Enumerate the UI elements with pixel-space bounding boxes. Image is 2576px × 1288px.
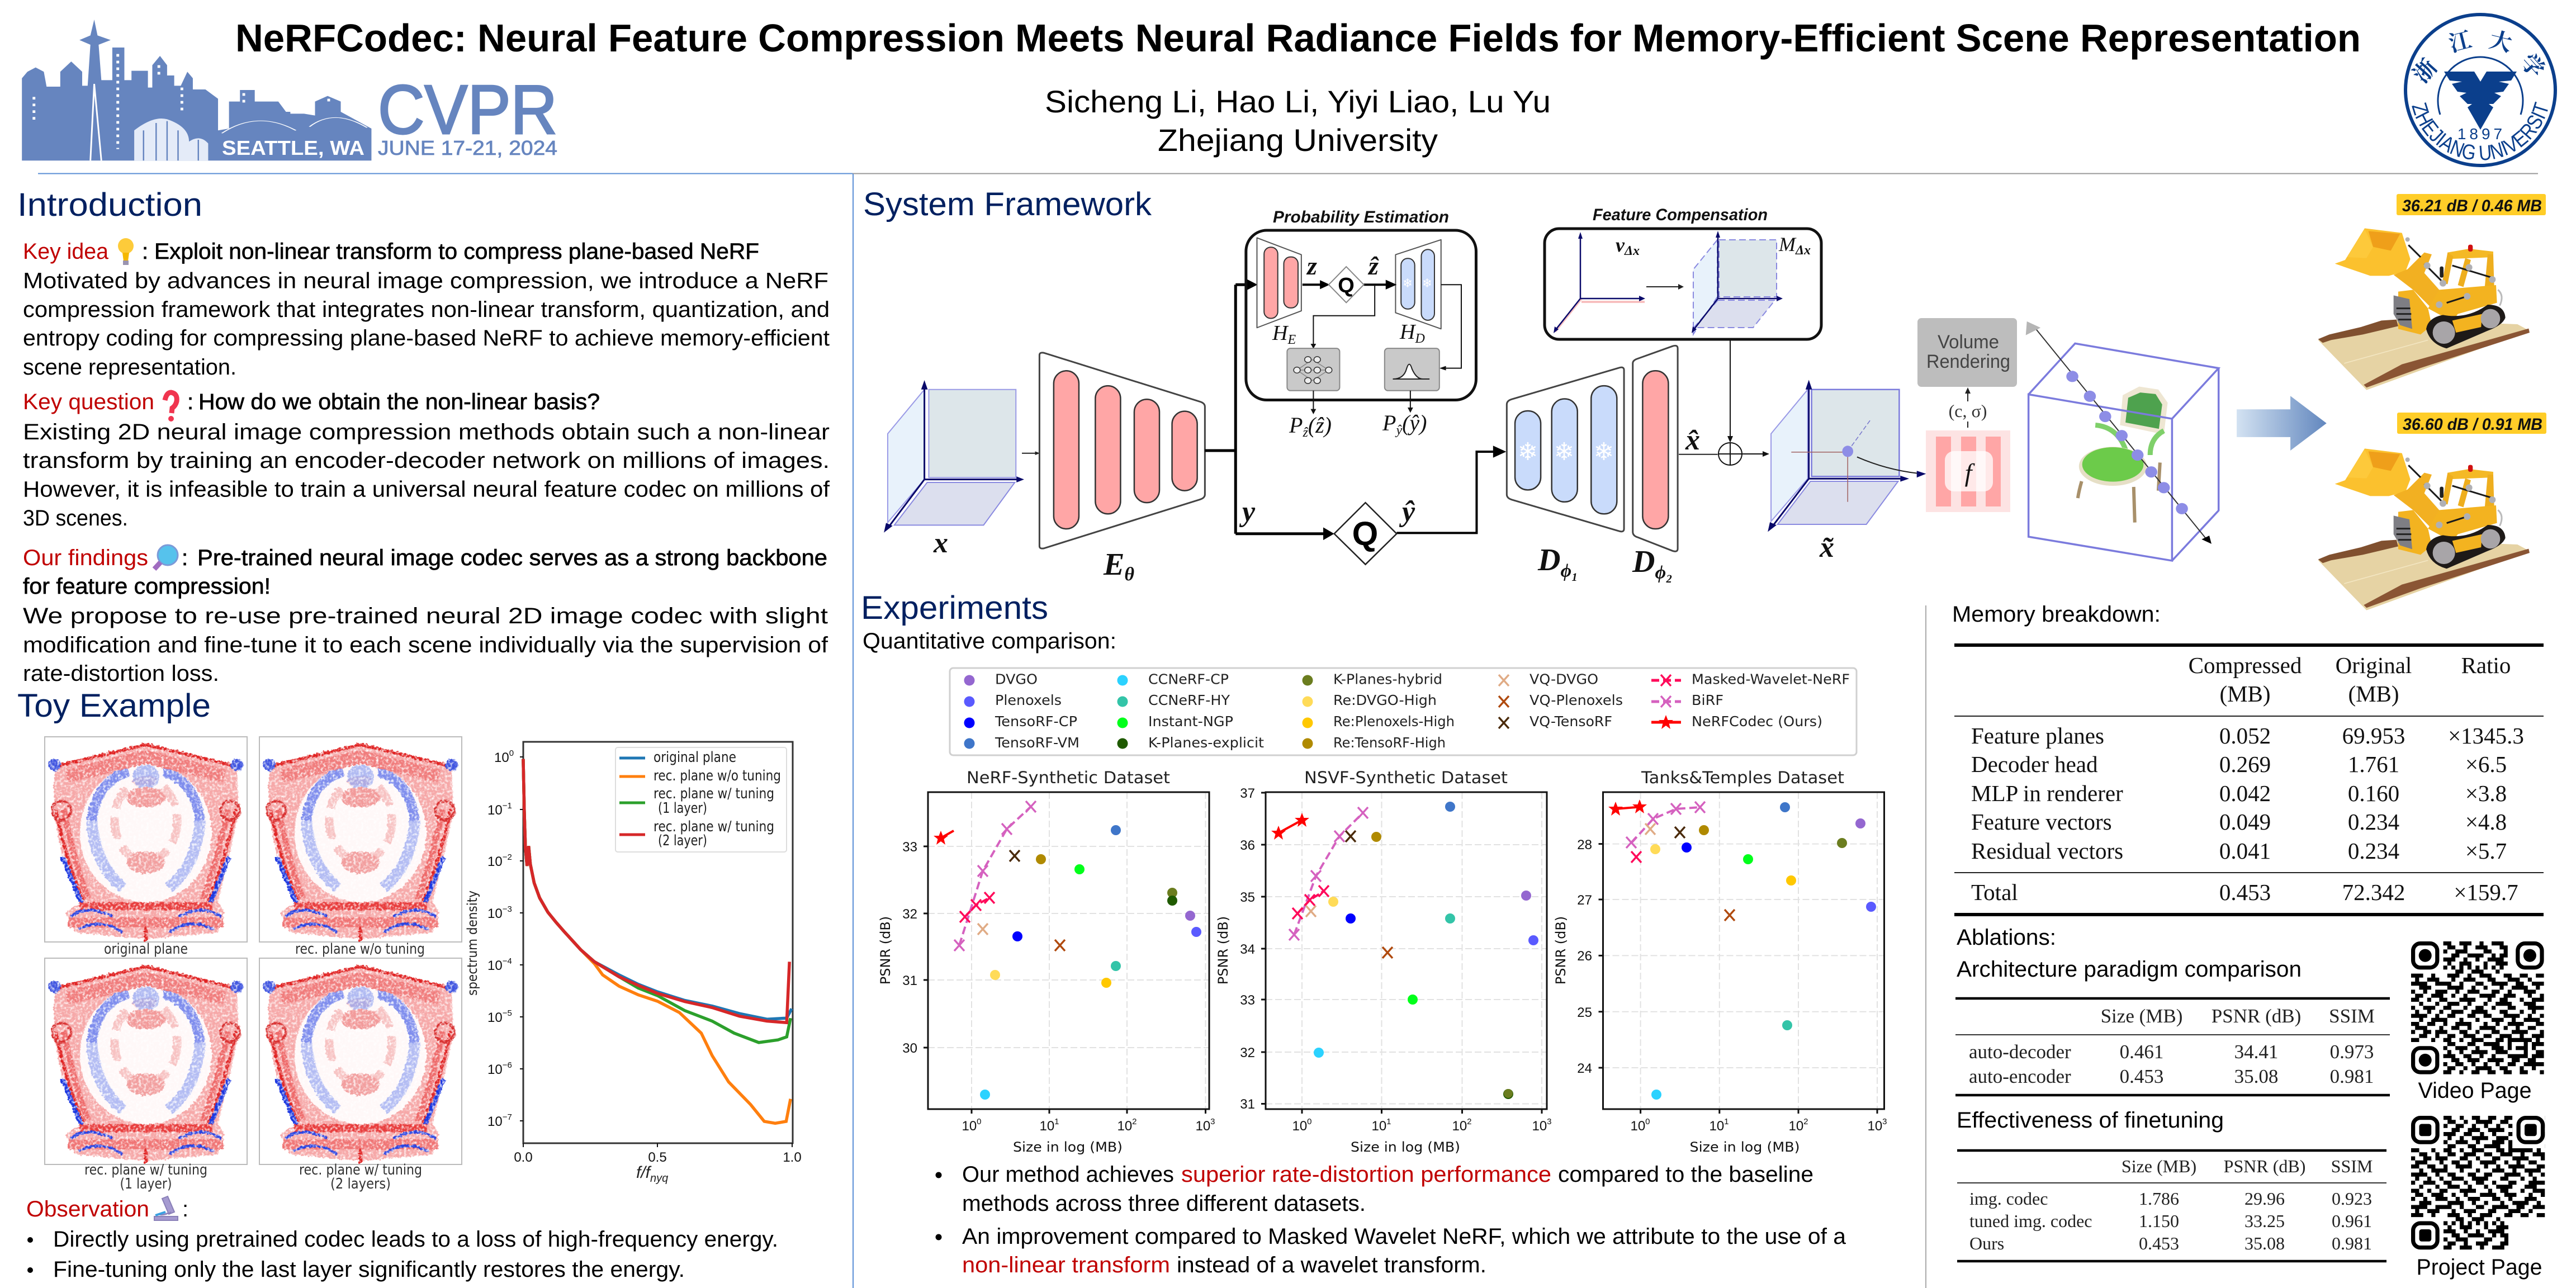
math labels: (ẑ) bbox=[1308, 413, 1332, 438]
authors: Sicheng Li, Hao Li, Yiyi Liao, Lu Yu bbox=[1045, 84, 1551, 119]
table: memory breakdown: 0.269 bbox=[2219, 751, 2271, 777]
chart legend: VQ-Plenoxels bbox=[1530, 692, 1623, 708]
result images: bulldozer renders bbox=[2318, 228, 2530, 610]
text block: key question: How do we obtain the non-linear basis? bbox=[198, 390, 600, 414]
math labels: P bbox=[1382, 410, 1396, 435]
logo: Zhejiang University seal bbox=[2404, 13, 2557, 167]
table: memory breakdown: 0.234 bbox=[2348, 838, 2399, 864]
chart: spectrum density: −5 bbox=[503, 1008, 512, 1018]
text block: key idea: Exploit non-linear transform to compress plane-based NeRF bbox=[154, 239, 759, 264]
chart: NeRF-Synthetic: PSNR (dB) bbox=[878, 916, 893, 984]
header: title: NeRFCodec: Neural Feature Compression Meets Neural Radiance Fields for Memory-Efficient Scene Representation bbox=[235, 16, 2361, 60]
table: finetuning: 29.96 bbox=[2244, 1188, 2285, 1209]
table: memory breakdown: ×6.5 bbox=[2465, 751, 2507, 777]
table: architecture paradigm: PSNR (dB) bbox=[2212, 1005, 2301, 1027]
chart: NeRF-Synthetic: Size in log (MB) bbox=[1013, 1139, 1123, 1155]
table: memory breakdown: Ratio bbox=[2461, 652, 2511, 678]
chart: Tanks and Temples: 2 bbox=[1803, 1117, 1808, 1126]
snowflake icons: ❄ bbox=[1518, 438, 1538, 466]
text block: our findings bbox=[23, 545, 828, 686]
title: probability estimation: Probability Estimation bbox=[1273, 208, 1449, 226]
affiliation: Zhejiang University bbox=[1158, 122, 1438, 158]
chart: Tanks and Temples: PSNR (dB) bbox=[1553, 916, 1569, 984]
table: memory breakdown: (MB) bbox=[2219, 681, 2271, 707]
chart legend: Masked-Wavelet-NeRF bbox=[1692, 671, 1850, 688]
chart: spectrum density: nyq bbox=[650, 1172, 668, 1185]
title: feature compensation: Feature Compensation bbox=[1593, 206, 1768, 224]
table: architecture paradigm: 0.981 bbox=[2330, 1066, 2374, 1087]
text block: experiment findings: compared to the baseline bbox=[1558, 1162, 1813, 1187]
text block: our findings: : bbox=[182, 546, 188, 570]
chart: spectrum density: 10 bbox=[494, 750, 509, 765]
chart: spectrum density: −2 bbox=[503, 853, 512, 862]
heatmap: rec plane tuning 1 layer: rec. plane w/ tuning bbox=[84, 1162, 207, 1178]
text block: our findings: We propose to re-use pre-trained neural 2D image codec with slight bbox=[23, 604, 828, 628]
chart: Tanks and Temples: 24 bbox=[1577, 1061, 1592, 1076]
table: memory breakdown bbox=[1954, 645, 2544, 915]
chart: spectrum density: rec. plane w/ tuning bbox=[654, 785, 774, 802]
heatmap: rec plane tuning 2 layers: (2 layers) bbox=[330, 1176, 391, 1192]
chart: spectrum density: 10 bbox=[487, 1010, 503, 1025]
subheading: effectiveness of finetuning: Effectiveness of finetuning bbox=[1957, 1108, 2224, 1133]
3D box with chair and ray samples bbox=[2026, 321, 2219, 561]
chart: spectrum density: 10 bbox=[487, 854, 503, 869]
snowflake icons: ❄ bbox=[1554, 438, 1574, 466]
QR code: video page: Video Page bbox=[2418, 1078, 2531, 1103]
table: architecture paradigm: 0.973 bbox=[2330, 1041, 2374, 1063]
chart: NSVF-Synthetic: 3 bbox=[1547, 1117, 1552, 1126]
chart: NeRF-Synthetic: 31 bbox=[902, 973, 917, 988]
text block: our findings: rate-distortion loss. bbox=[23, 661, 219, 686]
text block: key idea: entropy coding for compressing plane-based NeRF to achieve memory-efficient bbox=[23, 326, 830, 351]
text block: our findings: Pre-trained neural image codec serves as a strong backbone bbox=[197, 546, 827, 570]
panel: ablations bbox=[1955, 925, 2390, 1261]
heatmap: rec plane tuning 2 layers bbox=[259, 958, 462, 1192]
text block: key question bbox=[23, 390, 830, 531]
chart: NeRF-Synthetic: 32 bbox=[902, 907, 917, 922]
table: memory breakdown: ×5.7 bbox=[2465, 838, 2507, 864]
table: finetuning: tuned img. codec bbox=[1969, 1211, 2092, 1231]
logo: Zhejiang University seal: 1897 bbox=[2457, 125, 2506, 143]
table: finetuning: 1.150 bbox=[2139, 1211, 2179, 1231]
math labels: ϕ₁ bbox=[1560, 561, 1578, 581]
chart: NeRF-Synthetic: 33 bbox=[902, 840, 917, 855]
chart legend: CCNeRF-HY bbox=[1148, 692, 1230, 708]
heatmap: rec plane tuning 2 layers: rec. plane w/ tuning bbox=[299, 1162, 422, 1178]
chart legend: TensoRF-CP bbox=[995, 713, 1077, 730]
chart: spectrum density: −7 bbox=[503, 1112, 512, 1122]
table: architecture paradigm: 0.453 bbox=[2120, 1066, 2163, 1087]
text block: key question: However, it is infeasible to train a universal neural feature codec on millions of bbox=[23, 477, 830, 502]
math labels: M bbox=[1779, 233, 1796, 255]
table: architecture paradigm: auto-decoder bbox=[1969, 1041, 2071, 1063]
chart: NeRF-Synthetic: 10 bbox=[962, 1119, 977, 1134]
volume rendering box: Volume bbox=[1938, 332, 1999, 353]
chart: Tanks and Temples: 1 bbox=[1724, 1117, 1729, 1126]
chart: NSVF-Synthetic: 34 bbox=[1240, 942, 1255, 957]
text block: key question: transform by training an encoder-decoder network on millions of images. bbox=[23, 448, 830, 473]
chart: Tanks and Temples: 27 bbox=[1577, 893, 1592, 908]
math labels: Δx bbox=[1795, 243, 1811, 258]
panel: memory breakdown bbox=[1952, 602, 2544, 915]
math labels: H bbox=[1400, 320, 1415, 344]
math labels: E bbox=[1104, 547, 1124, 582]
QR code: project page bbox=[2411, 1116, 2545, 1280]
label: quality top: 36.21 dB / 0.46 MB bbox=[2402, 197, 2542, 215]
table: memory breakdown: ×3.8 bbox=[2465, 780, 2507, 806]
math labels: P bbox=[1289, 413, 1303, 438]
chart: spectrum density: 0 bbox=[509, 749, 514, 758]
table: architecture paradigm: 0.461 bbox=[2120, 1041, 2163, 1063]
heatmap: rec plane without tuning bbox=[259, 737, 462, 958]
chart legend: NeRFCodec (Ours) bbox=[1692, 713, 1822, 730]
logo: CVPR Seattle: SEATTLE, WA bbox=[222, 136, 364, 159]
table: memory breakdown: 0.160 bbox=[2348, 780, 2399, 806]
table: finetuning: 0.923 bbox=[2332, 1188, 2372, 1209]
chart legend: TensoRF-VM bbox=[995, 735, 1079, 751]
logo: Zhejiang University seal: 江 bbox=[2446, 27, 2474, 57]
chart: NSVF-Synthetic: 33 bbox=[1240, 993, 1255, 1008]
chart: Tanks and Temples: 0 bbox=[1645, 1117, 1650, 1126]
math labels: ϕ₂ bbox=[1655, 562, 1673, 583]
table: finetuning: Size (MB) bbox=[2122, 1156, 2196, 1176]
text block: key idea: compression framework that integrates non-linear transform, quantization, and bbox=[23, 297, 830, 322]
probability estimation box bbox=[1246, 230, 1476, 414]
math labels: z bbox=[1306, 252, 1317, 280]
table: finetuning: SSIM bbox=[2331, 1156, 2373, 1176]
text block: our findings: modification and fine-tune it to each scene individually via the supervision of bbox=[23, 633, 828, 657]
table: memory breakdown: (MB) bbox=[2348, 681, 2399, 707]
math labels: (ŷ) bbox=[1402, 410, 1427, 435]
chart: NSVF-Synthetic bbox=[1215, 768, 1552, 1155]
volume rendering box: Rendering bbox=[1926, 351, 2010, 372]
table: finetuning: img. codec bbox=[1969, 1188, 2048, 1209]
table: finetuning: Ours bbox=[1969, 1233, 2004, 1253]
table: memory breakdown: 0.453 bbox=[2219, 879, 2271, 905]
chart: NeRF-Synthetic: 0 bbox=[977, 1117, 982, 1126]
snowflake icons bbox=[1403, 277, 1614, 466]
QR code: project page: Project Page bbox=[2416, 1255, 2542, 1280]
math labels: ẑ bbox=[1367, 252, 1379, 280]
decoder D phi 1 bbox=[1507, 367, 1624, 532]
chart: NSVF-Synthetic: Size in log (MB) bbox=[1351, 1139, 1460, 1155]
chart: NSVF-Synthetic: 10 bbox=[1292, 1119, 1307, 1134]
chart legend: Re:TensoRF-High bbox=[1333, 735, 1446, 751]
panel: introduction bbox=[17, 187, 830, 686]
panel: experiments bbox=[861, 590, 1887, 1277]
math labels bbox=[933, 233, 1834, 585]
text block: experiment findings: An improvement compared to Masked Wavelet NeRF, which we attribute to the use of a bbox=[962, 1224, 1846, 1249]
text block: experiment findings bbox=[936, 1162, 1846, 1277]
feature compensation box bbox=[1545, 229, 1821, 339]
chart: NeRF-Synthetic: 2 bbox=[1132, 1117, 1137, 1126]
table: architecture paradigm: Size (MB) bbox=[2101, 1005, 2182, 1027]
subheading: architecture paradigm comparison: Architecture paradigm comparison bbox=[1957, 957, 2302, 982]
chart legend: Plenoxels bbox=[995, 692, 1062, 708]
math labels: D bbox=[1632, 544, 1655, 579]
chart legend: Instant-NGP bbox=[1148, 713, 1233, 730]
chart: spectrum density: spectrum density bbox=[465, 891, 480, 996]
chart: Tanks and Temples: 28 bbox=[1577, 837, 1592, 853]
text block: key idea: : bbox=[142, 239, 148, 264]
chart: NSVF-Synthetic: 37 bbox=[1240, 786, 1255, 801]
logo: CVPR Seattle: JUNE 17-21, 2024 bbox=[378, 136, 557, 159]
chart legend: BiRF bbox=[1692, 692, 1723, 708]
text block: key question: : bbox=[187, 390, 193, 414]
chart: spectrum density: −1 bbox=[503, 801, 512, 811]
chart: spectrum density bbox=[465, 742, 802, 1185]
table: architecture paradigm bbox=[1955, 998, 2390, 1095]
sum node and connectors bbox=[1718, 339, 1769, 465]
chart: NSVF-Synthetic: 2 bbox=[1467, 1117, 1472, 1126]
table: finetuning: 0.961 bbox=[2332, 1211, 2372, 1231]
chart: NeRF-Synthetic: 3 bbox=[1210, 1117, 1215, 1126]
table: architecture paradigm: auto-encoder bbox=[1969, 1066, 2071, 1087]
math labels: Q bbox=[1352, 515, 1378, 552]
table: finetuning: 35.08 bbox=[2244, 1233, 2285, 1253]
heatmap: rec plane tuning 1 layer: (1 layer) bbox=[120, 1176, 172, 1192]
table: memory breakdown: 0.042 bbox=[2219, 780, 2271, 806]
math labels: ẑ bbox=[1302, 425, 1308, 440]
diagram: encoder decoder shapes and connectors bbox=[884, 230, 1718, 565]
heatmap: original plane bbox=[45, 737, 247, 958]
chart: spectrum density: 10 bbox=[487, 958, 503, 973]
panel: system framework bbox=[863, 186, 2546, 610]
chart legend bbox=[950, 668, 1857, 755]
text block: observation bbox=[26, 1196, 778, 1282]
table: architecture paradigm: 34.41 bbox=[2234, 1041, 2278, 1063]
chart legend: Re:Plenoxels-High bbox=[1333, 713, 1455, 730]
text block: experiment findings: instead of a wavelet transform. bbox=[1177, 1253, 1486, 1277]
table: memory breakdown: 72.342 bbox=[2342, 879, 2405, 905]
text block: experiment findings: non-linear transform bbox=[962, 1253, 1170, 1277]
heading: Toy Example: Toy Example bbox=[17, 688, 211, 724]
text block: observation: : bbox=[182, 1197, 188, 1221]
heatmap: rec plane tuning 1 layer bbox=[45, 958, 247, 1192]
table: memory breakdown: Feature planes bbox=[1971, 723, 2104, 749]
chart: Tanks and Temples: 10 bbox=[1630, 1119, 1645, 1134]
math labels: ŷ bbox=[1399, 496, 1415, 528]
table: memory breakdown: 1.761 bbox=[2348, 751, 2399, 777]
chart: Tanks and Temples bbox=[1553, 768, 1887, 1155]
chart: NSVF-Synthetic: NSVF-Synthetic Dataset bbox=[1304, 768, 1508, 787]
chart: Tanks and Temples: 10 bbox=[1788, 1119, 1803, 1134]
chart: NSVF-Synthetic: PSNR (dB) bbox=[1215, 916, 1231, 984]
table: memory breakdown: Total bbox=[1971, 879, 2018, 905]
arrow: to results bbox=[2237, 396, 2327, 451]
chart: NSVF-Synthetic: 10 bbox=[1452, 1119, 1467, 1134]
chart: NSVF-Synthetic: 0 bbox=[1307, 1117, 1312, 1126]
math labels: Q bbox=[1338, 274, 1355, 297]
chart legend: VQ-DVGO bbox=[1530, 671, 1598, 688]
chart: Tanks and Temples: Tanks&Temples Dataset bbox=[1641, 768, 1844, 787]
logo: CVPR Seattle bbox=[22, 20, 557, 160]
chart legend: CCNeRF-CP bbox=[1148, 671, 1229, 688]
QR code: video page bbox=[2411, 944, 2544, 1103]
table: memory breakdown: Compressed bbox=[2189, 652, 2302, 678]
chart: Tanks and Temples: Size in log (MB) bbox=[1689, 1139, 1800, 1155]
chart: spectrum density: −3 bbox=[503, 905, 512, 914]
math labels: E bbox=[1287, 333, 1296, 347]
chart: Tanks and Temples: 25 bbox=[1577, 1005, 1592, 1020]
table: finetuning: 0.981 bbox=[2332, 1233, 2372, 1253]
text block: our findings: Our findings bbox=[23, 546, 148, 570]
chart: NeRF-Synthetic: 1 bbox=[1054, 1117, 1059, 1126]
text block: key question: 3D scenes. bbox=[23, 506, 128, 531]
chart: spectrum density: rec. plane w/o tuning bbox=[654, 768, 781, 784]
input planes x bbox=[884, 380, 1040, 533]
heading: Introduction: Introduction bbox=[17, 187, 202, 223]
chart: NSVF-Synthetic: 36 bbox=[1240, 838, 1255, 853]
table: memory breakdown: 0.234 bbox=[2348, 809, 2399, 835]
math labels: Δx bbox=[1624, 244, 1640, 258]
chart: NeRF-Synthetic bbox=[878, 768, 1215, 1155]
renderer f block bbox=[1926, 430, 2010, 512]
text block: key question: Key question bbox=[23, 390, 154, 414]
math labels: D bbox=[1538, 543, 1560, 577]
chart legend: Re:DVGO-High bbox=[1333, 692, 1437, 708]
snowflake icons: ❄ bbox=[1403, 277, 1413, 291]
renderer f block: f bbox=[1965, 458, 1976, 487]
chart: spectrum density: 10 bbox=[487, 803, 503, 818]
panel: toy example bbox=[17, 688, 802, 1282]
table: finetuning: 33.25 bbox=[2244, 1211, 2285, 1231]
table: memory breakdown: MLP in renderer bbox=[1971, 780, 2123, 806]
chart: spectrum density: f/f bbox=[636, 1163, 650, 1182]
math labels: ŷ bbox=[1395, 423, 1402, 438]
table: memory breakdown: Residual vectors bbox=[1971, 838, 2123, 864]
math labels: y bbox=[1239, 496, 1256, 528]
table: finetuning: 1.786 bbox=[2139, 1188, 2179, 1209]
subheading: memory breakdown: Memory breakdown: bbox=[1952, 602, 2161, 627]
table: memory breakdown: 0.041 bbox=[2219, 838, 2271, 864]
chart: Tanks and Temples: 10 bbox=[1709, 1119, 1724, 1134]
chart: Tanks and Temples: 3 bbox=[1882, 1117, 1887, 1126]
chart: NSVF-Synthetic: 32 bbox=[1240, 1045, 1255, 1060]
chart: spectrum density: 10 bbox=[487, 1114, 503, 1129]
math labels: x̃ bbox=[1819, 532, 1834, 564]
encoder E bbox=[1039, 353, 1205, 548]
text block: our findings: for feature compression! bbox=[23, 574, 271, 599]
chart: NeRF-Synthetic: 10 bbox=[1039, 1119, 1054, 1134]
snowflake icons: ❄ bbox=[1422, 277, 1432, 291]
chart: spectrum density: −6 bbox=[503, 1060, 512, 1070]
heading: Experiments: Experiments bbox=[861, 590, 1048, 626]
math labels: x bbox=[933, 527, 948, 559]
subheading: quantitative comparison: Quantitative comparison: bbox=[863, 629, 1116, 654]
table: memory breakdown: Original bbox=[2336, 652, 2412, 678]
chart legend: K-Planes-hybrid bbox=[1333, 671, 1442, 688]
table: memory breakdown: Feature vectors bbox=[1971, 809, 2112, 835]
chart: NSVF-Synthetic: 10 bbox=[1532, 1119, 1547, 1134]
chart: NSVF-Synthetic: 31 bbox=[1240, 1097, 1255, 1112]
text block: experiment findings: superior rate-distortion performance bbox=[1181, 1162, 1551, 1187]
chart: spectrum density: 10 bbox=[487, 1062, 503, 1077]
math labels: v bbox=[1616, 234, 1625, 256]
text block: key idea: scene representation. bbox=[23, 355, 236, 380]
chart: spectrum density: 10 bbox=[487, 906, 503, 921]
chart: spectrum density: −4 bbox=[503, 956, 512, 966]
text block: key idea: Motivated by advances in neural image compression, we introduce a NeRF bbox=[23, 268, 828, 293]
logo: Zhejiang University seal: 浙 bbox=[2408, 54, 2442, 88]
table: finetuning: 0.453 bbox=[2139, 1233, 2179, 1253]
table: finetuning: PSNR (dB) bbox=[2224, 1156, 2305, 1176]
heatmap: original plane: original plane bbox=[104, 941, 188, 958]
math labels: H bbox=[1272, 321, 1287, 345]
chart: NeRF-Synthetic: 10 bbox=[1117, 1119, 1132, 1134]
table: memory breakdown: Decoder head bbox=[1971, 751, 2098, 777]
chart: NSVF-Synthetic: 35 bbox=[1240, 890, 1255, 905]
math labels: x̂ bbox=[1685, 424, 1700, 456]
logo: CVPR Seattle: CVPR bbox=[378, 72, 557, 149]
chart: NeRF-Synthetic: 30 bbox=[902, 1041, 917, 1056]
table: memory breakdown: 0.049 bbox=[2219, 809, 2271, 835]
text block: observation: Observation bbox=[26, 1197, 149, 1221]
volume rendering box: (c, σ) bbox=[1949, 401, 1987, 421]
chart: spectrum density: 0.0 bbox=[514, 1150, 533, 1165]
chart legend: DVGO bbox=[995, 671, 1038, 688]
text block: key idea: Key idea bbox=[23, 239, 109, 264]
heatmap: rec plane without tuning: rec. plane w/o tuning bbox=[295, 941, 425, 958]
chart: Tanks and Temples: 26 bbox=[1577, 949, 1592, 964]
chart: spectrum density: 0.5 bbox=[648, 1150, 667, 1165]
logo: Zhejiang University seal: 学 bbox=[2516, 49, 2549, 83]
chart: NeRF-Synthetic: NeRF-Synthetic Dataset bbox=[967, 768, 1170, 787]
output planes x tilde bbox=[1768, 380, 1926, 532]
text block: observation: Directly using pretrained codec leads to a loss of high-frequency energy. bbox=[53, 1227, 778, 1252]
table: memory breakdown: ×4.8 bbox=[2465, 809, 2507, 835]
table: memory breakdown: 0.052 bbox=[2219, 723, 2271, 749]
connectors thick bbox=[1205, 279, 1506, 565]
heading: System Framework: System Framework bbox=[863, 186, 1152, 222]
chart: spectrum density: 1.0 bbox=[783, 1150, 802, 1165]
table: memory breakdown: 69.953 bbox=[2342, 723, 2405, 749]
chart: spectrum density: original plane bbox=[654, 749, 736, 766]
subheading: ablations: Ablations: bbox=[1957, 925, 2056, 950]
chart legend: K-Planes-explicit bbox=[1148, 735, 1264, 751]
decoder D phi 2 bbox=[1633, 345, 1678, 551]
logo: Zhejiang University seal: 大 bbox=[2487, 27, 2515, 57]
chart: NSVF-Synthetic: 1 bbox=[1386, 1117, 1391, 1126]
chart legend: VQ-TensoRF bbox=[1530, 713, 1612, 730]
chart: spectrum density: (1 layer) bbox=[658, 800, 707, 817]
chart: NSVF-Synthetic: 10 bbox=[1371, 1119, 1386, 1134]
math labels: θ bbox=[1124, 564, 1134, 585]
chart: spectrum density: rec. plane w/ tuning bbox=[654, 818, 774, 835]
text block: key idea bbox=[23, 238, 830, 380]
text block: key question: Existing 2D neural image compression methods obtain such a non-linear bbox=[23, 420, 830, 444]
table: architecture paradigm: 35.08 bbox=[2234, 1066, 2278, 1087]
volume rendering box bbox=[1917, 318, 2017, 428]
table: memory breakdown: ×1345.3 bbox=[2448, 723, 2524, 749]
chart: spectrum density: (2 layer) bbox=[658, 832, 707, 849]
math labels: D bbox=[1414, 332, 1425, 346]
label: quality bottom: 36.60 dB / 0.91 MB bbox=[2403, 415, 2542, 434]
table: memory breakdown: ×159.7 bbox=[2454, 879, 2518, 905]
table: architecture paradigm: SSIM bbox=[2329, 1005, 2375, 1027]
chart: NeRF-Synthetic: 10 bbox=[1195, 1119, 1210, 1134]
text block: observation: Fine-tuning only the last layer significantly restores the energy. bbox=[53, 1257, 685, 1282]
snowflake icons: ❄ bbox=[1594, 438, 1614, 466]
chart: Tanks and Temples: 10 bbox=[1867, 1119, 1882, 1134]
text block: experiment findings: methods across three different datasets. bbox=[962, 1191, 1366, 1216]
table: finetuning bbox=[1957, 1150, 2386, 1261]
text block: experiment findings: Our method achieves bbox=[962, 1162, 1174, 1187]
